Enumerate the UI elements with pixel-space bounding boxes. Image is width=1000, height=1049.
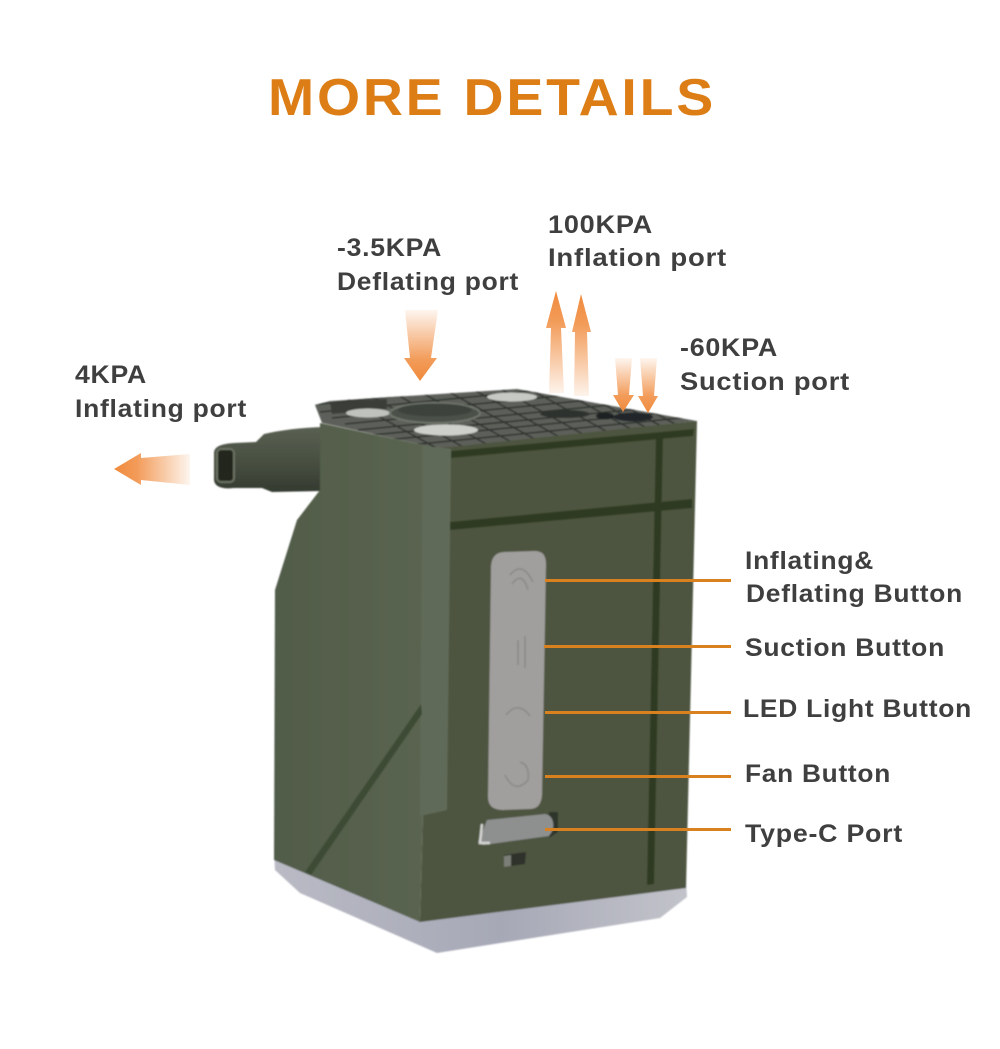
label: 4KPA inflating port	[75, 361, 247, 423]
arrow: suction port left	[613, 358, 634, 412]
button panel	[488, 551, 546, 810]
air nozzle	[214, 427, 322, 492]
label: fan button: Fan Button	[745, 760, 891, 788]
top grille	[314, 388, 696, 448]
label: inflating and deflating button: Deflating Button	[746, 580, 963, 608]
label: -3.5KPA deflating port: -3.5KPA	[337, 234, 442, 262]
label: type-c port: Type-C Port	[745, 820, 903, 848]
arrow: inflation port right	[572, 294, 591, 396]
front-left corner strip	[420, 444, 451, 816]
arrow: deflating port	[404, 310, 438, 381]
label: 100KPA inflation port: 100KPA	[548, 211, 653, 239]
label: 100KPA inflation port	[548, 211, 727, 272]
diagonal seam	[305, 704, 422, 875]
pump body	[214, 374, 715, 953]
type-c port	[478, 812, 558, 845]
left face	[274, 423, 433, 922]
title: MORE DETAILS	[268, 69, 716, 127]
label: -3.5KPA deflating port: Deflating port	[337, 268, 519, 296]
indicator light	[504, 852, 526, 867]
label: suction button: Suction Button	[745, 634, 945, 662]
label: -60KPA suction port: Suction port	[680, 368, 850, 396]
middle groove	[450, 499, 692, 530]
top edge groove	[451, 429, 694, 458]
label: 4KPA inflating port: 4KPA	[75, 361, 147, 389]
arrow: suction port right	[638, 358, 658, 413]
vertical groove	[647, 434, 663, 885]
label: inflating and deflating button	[745, 547, 963, 608]
arrow: inflating port	[114, 453, 190, 485]
leader lines	[544, 579, 731, 831]
label: -3.5KPA deflating port	[337, 234, 519, 296]
front face	[420, 421, 697, 922]
base	[274, 845, 687, 953]
label: -60KPA suction port: -60KPA	[680, 334, 778, 362]
label: inflating and deflating button: Inflating&	[745, 547, 874, 575]
label: 100KPA inflation port: Inflation port	[548, 244, 727, 272]
arrow: inflation port left	[546, 291, 566, 393]
label: LED light button: LED Light Button	[743, 695, 972, 723]
label: 4KPA inflating port: Inflating port	[75, 395, 247, 423]
label: -60KPA suction port	[680, 334, 850, 396]
